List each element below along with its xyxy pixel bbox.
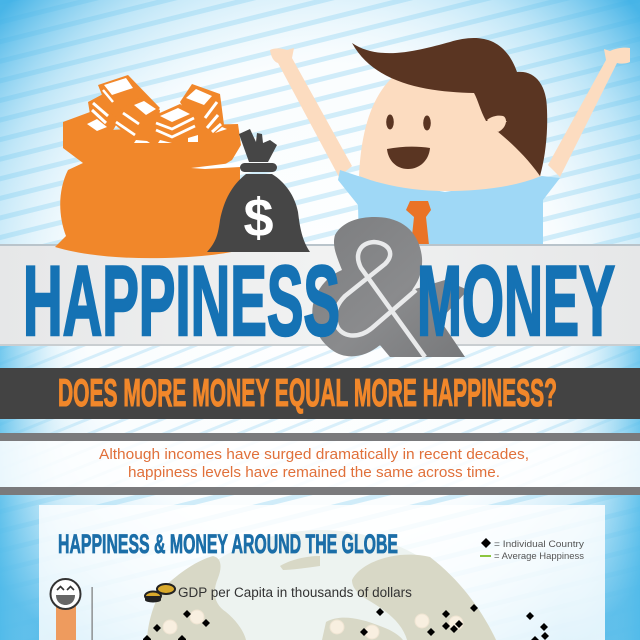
bag body (207, 174, 310, 252)
legend: = Average Happiness (494, 551, 584, 562)
hair (352, 38, 547, 176)
money shown at cuff (87, 119, 227, 143)
shirt (338, 170, 560, 245)
white ampersand line (335, 242, 425, 357)
dollar sign: $ (243, 188, 274, 248)
right raised arm (548, 48, 630, 177)
intro text band (0, 433, 640, 495)
left raised arm (270, 48, 352, 177)
stack: back right (180, 84, 224, 142)
panel: happiness and money around the globe (39, 505, 605, 640)
orange tie (406, 201, 431, 245)
ampersand (312, 217, 468, 357)
icon: laughing face (50, 579, 80, 609)
country data points (143, 604, 549, 640)
bag neck (240, 163, 277, 172)
chart heading: HAPPINESS & MONEY AROUND THE GLOBE (58, 529, 398, 559)
icon: gold coins (145, 584, 175, 602)
stack: centre (112, 98, 160, 142)
title band (0, 244, 640, 346)
legend: = Individual Country (494, 539, 584, 550)
left eye (386, 114, 394, 130)
sack fold highlight (191, 162, 240, 169)
stack: back left (88, 93, 122, 132)
stack: top (98, 75, 160, 132)
mouth (387, 147, 430, 169)
vertical axis line (92, 587, 93, 640)
cash stacks (87, 75, 227, 145)
intro text band: happiness levels have remained the same across time. (128, 465, 500, 481)
grey ampersand glyph (312, 217, 468, 357)
sack body and cuff (55, 112, 241, 258)
legend (480, 538, 584, 562)
right eye (423, 116, 431, 130)
globe map (146, 530, 496, 640)
bag ties (239, 129, 277, 162)
smiley markers (163, 610, 463, 639)
title: happiness & money: HAPPINESS (23, 245, 340, 356)
icon: dark dollar bag (207, 129, 310, 252)
happiness axis bar (56, 606, 76, 640)
intro text band: Although incomes have surged dramatically in recent decades, (99, 447, 529, 463)
head (359, 75, 541, 191)
icon: orange money sack (55, 75, 241, 258)
illustration: happy man (270, 38, 630, 245)
chart axis label: GDP per Capita in thousands of dollars (178, 585, 412, 600)
stack: front right (153, 104, 197, 145)
ear (487, 116, 506, 132)
